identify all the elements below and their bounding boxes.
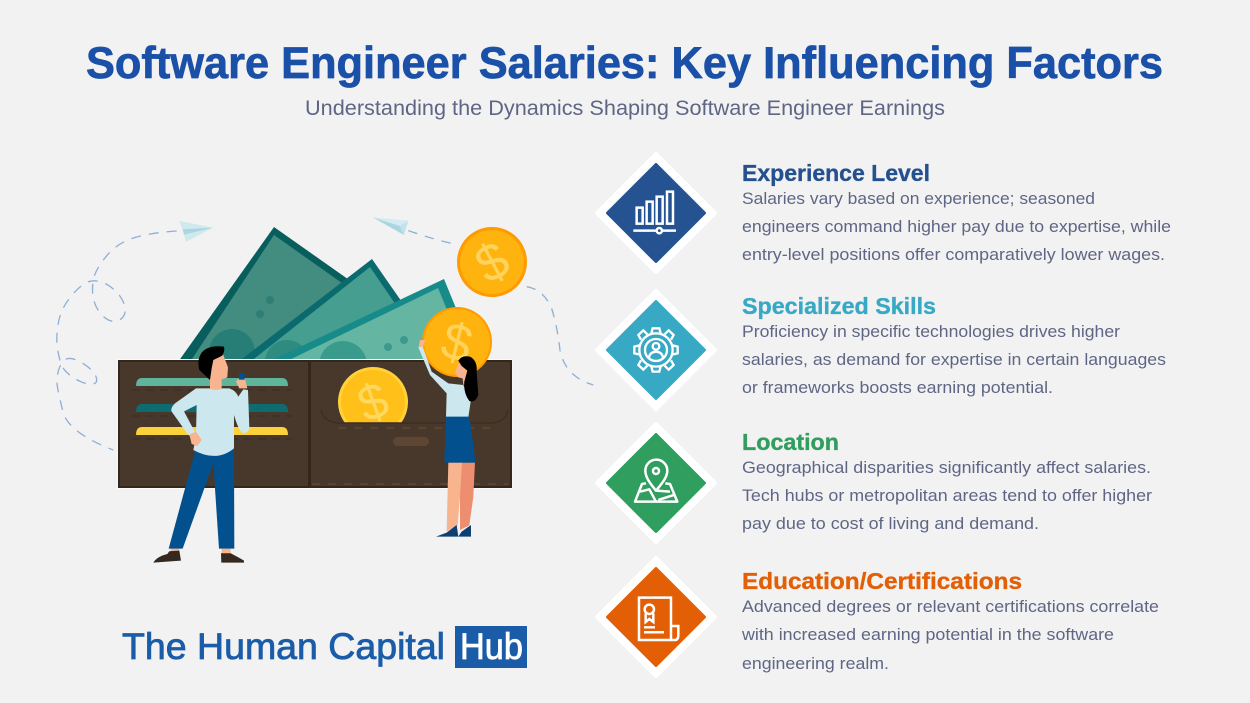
shirt — [171, 388, 249, 456]
illustration: wallet, money and people — [57, 217, 593, 563]
dashed trail left — [57, 231, 177, 450]
text block: education and certifications: Advanced degrees or relevant certifications correlate — [742, 597, 1159, 616]
hair — [198, 346, 224, 380]
subtitle: Understanding the Dynamics Shaping Software Engineer Earnings — [305, 97, 945, 120]
front bill — [268, 279, 460, 362]
text block: location: Tech hubs or metropolitan areas tend to offer higher — [742, 486, 1152, 505]
shoes — [153, 551, 244, 563]
text block: experience level — [742, 160, 1171, 264]
icon: specialized skills gear diamond — [597, 291, 715, 409]
text block: education and certifications: Education/Certifications — [742, 568, 1022, 594]
paper plane left — [179, 221, 213, 242]
logo: The Human Capital Hub: Hub — [460, 626, 523, 667]
hair — [458, 356, 478, 402]
hands and phone — [189, 378, 247, 446]
face — [455, 363, 467, 385]
text block: location: Location — [742, 429, 839, 455]
skirt — [444, 417, 476, 463]
banknotes — [178, 227, 460, 389]
icon: education certificate diamond — [597, 558, 715, 676]
text block: location: Geographical disparities significantly affect salaries. — [742, 458, 1151, 477]
wallet — [118, 359, 512, 489]
text block: location: pay due to cost of living and demand. — [742, 514, 1039, 533]
card slots — [132, 378, 292, 439]
icon: experience bar chart diamond — [597, 154, 715, 272]
pocket coin: $ — [350, 371, 396, 433]
text block: experience level: Experience Level — [742, 160, 930, 186]
text block: specialized skills — [742, 293, 1166, 397]
text block: education and certifications — [741, 568, 1159, 673]
wallet clasp — [393, 437, 429, 446]
title: Software Engineer Salaries: Key Influencing Factors — [86, 39, 1163, 88]
text block: specialized skills: Proficiency in specific technologies drives higher — [742, 322, 1120, 341]
icon: location map pin diamond — [597, 424, 715, 542]
held coin — [422, 307, 492, 377]
back bill — [178, 227, 352, 362]
text block: experience level: entry-level positions offer comparatively lower wages. — [742, 245, 1165, 264]
held coin: $ — [436, 311, 478, 375]
floating coin: $ — [466, 230, 519, 295]
text block: experience level: Salaries vary based on experience; seasoned — [742, 189, 1095, 208]
middle bill — [238, 259, 404, 362]
man figure — [153, 346, 249, 563]
text block: education and certifications: engineering realm. — [742, 654, 889, 673]
woman figure — [418, 340, 478, 537]
text block: specialized skills: Specialized Skills — [742, 293, 936, 319]
floating coin — [457, 227, 527, 297]
neck and face — [210, 355, 228, 390]
trousers — [169, 448, 234, 549]
legs — [460, 463, 475, 530]
text block: education and certifications: with increased earning potential in the software — [741, 625, 1114, 644]
text block: specialized skills: salaries, as demand for expertise in certain languages — [742, 350, 1166, 369]
text block: experience level: engineers command higher pay due to expertise, while — [742, 217, 1171, 236]
pocket coin — [338, 367, 408, 433]
logo: The Human Capital Hub: The Human Capital — [122, 626, 445, 667]
top and arm — [418, 347, 471, 417]
text block: location — [742, 429, 1152, 533]
text block: specialized skills: or frameworks boosts earning potential. — [742, 378, 1053, 397]
dashed trail right — [408, 231, 593, 385]
socks — [171, 549, 231, 554]
raised hand — [419, 340, 425, 348]
heels — [436, 525, 471, 537]
paper plane right — [373, 217, 408, 235]
